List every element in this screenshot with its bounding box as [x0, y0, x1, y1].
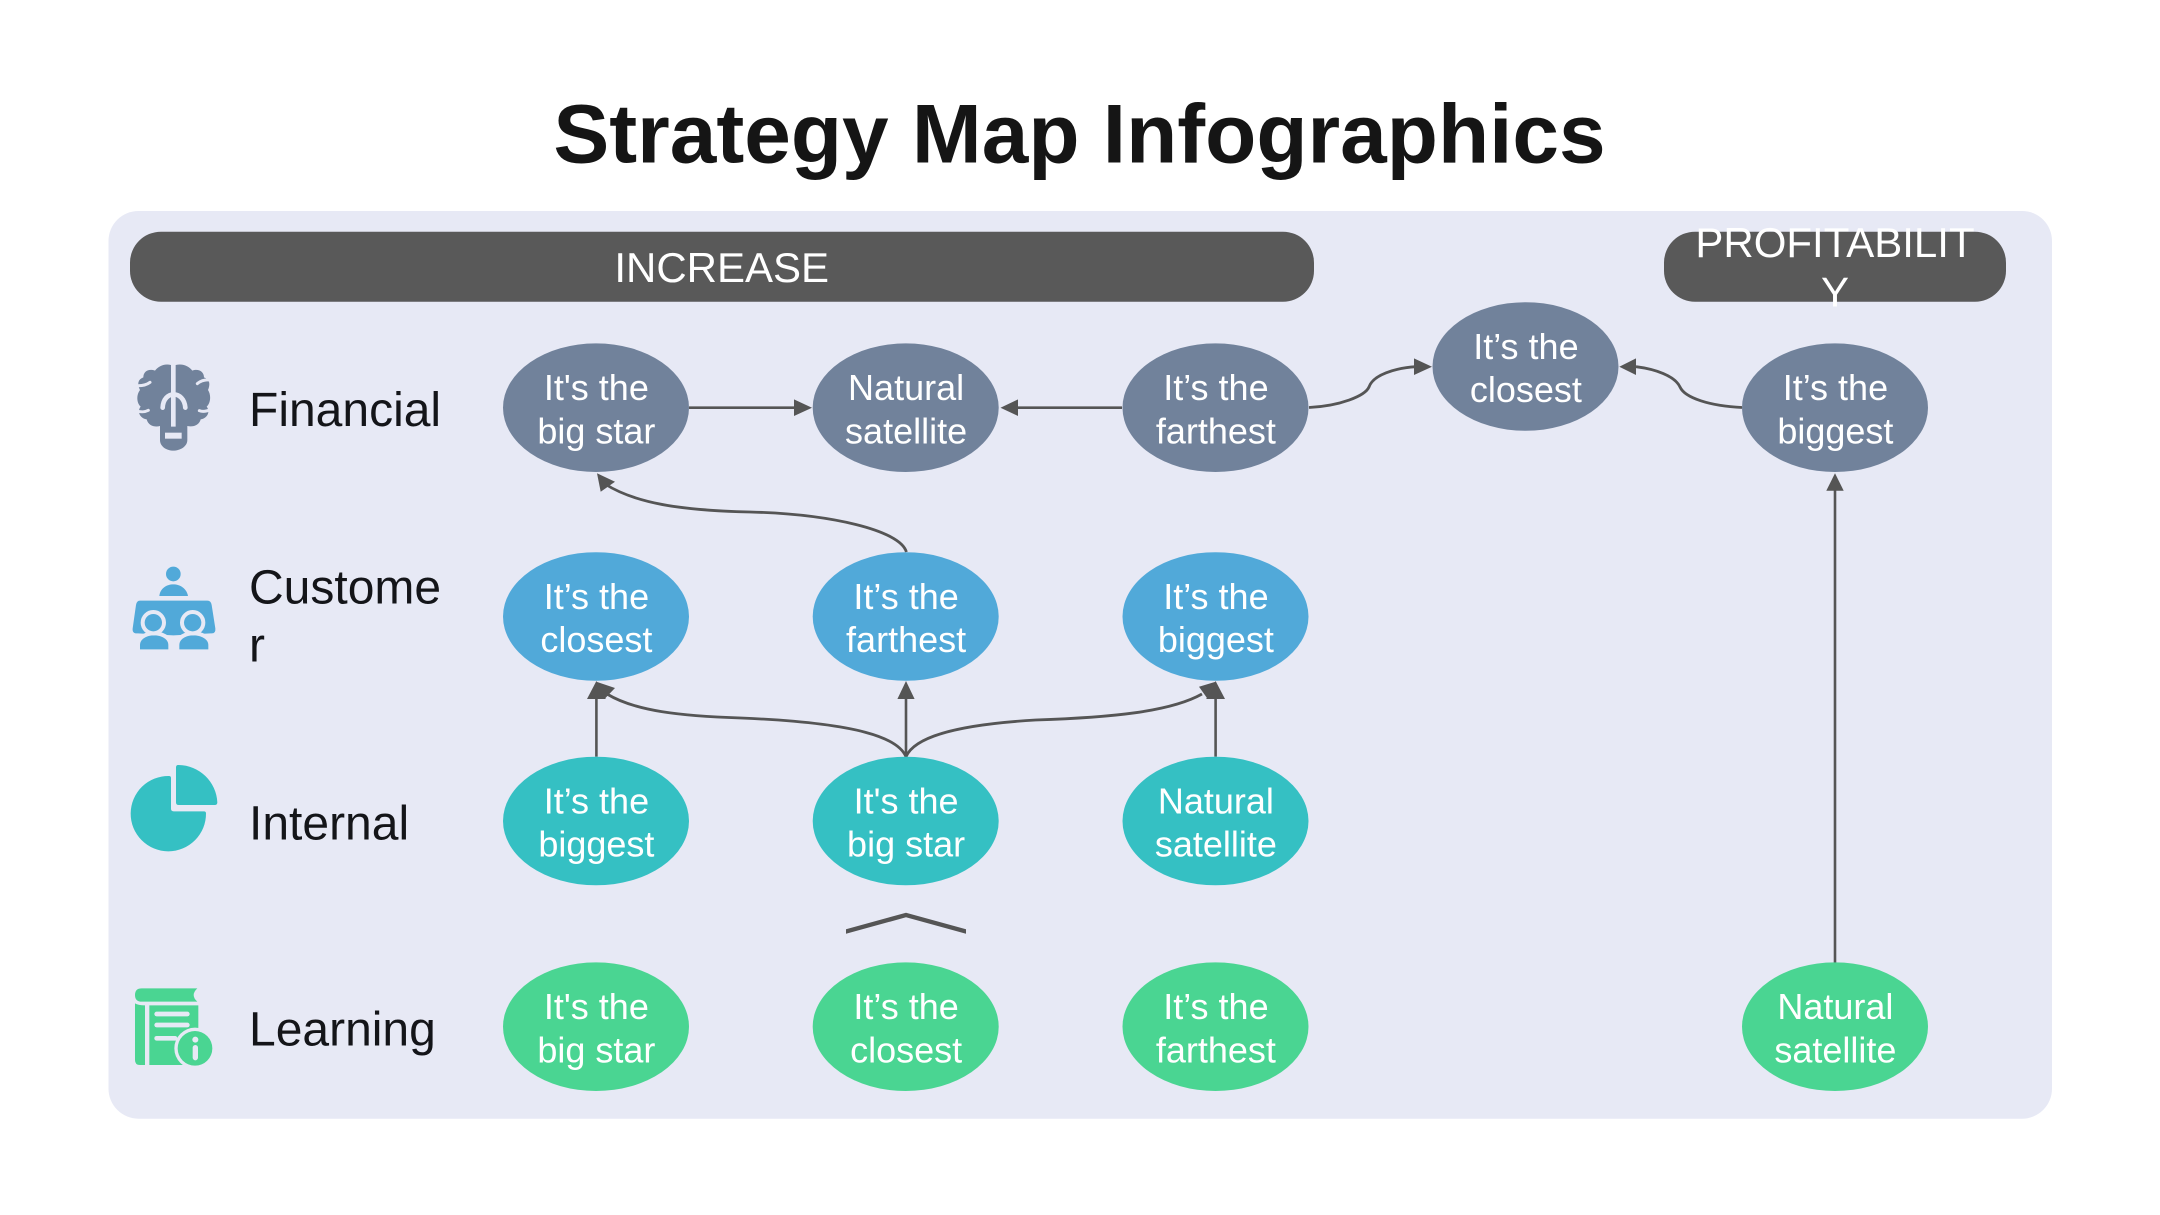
header pill: profitability: PROFITABILIT — [1695, 219, 1975, 266]
financial node: It's the big star: big star — [537, 410, 655, 451]
icon: book with info badge — [135, 988, 216, 1069]
internal node: Natural satellite: Natural — [1158, 780, 1274, 821]
row label: Customer: r — [249, 619, 265, 672]
row label: Learning: Learning — [249, 1004, 436, 1057]
learning node: It's the closest: It’s the — [853, 986, 959, 1027]
financial node: It's the biggest — [1742, 343, 1928, 472]
icon: brain with arrow — [136, 363, 211, 451]
financial node: Natural satellite: satellite — [845, 410, 967, 451]
financial node: It's the closest — [1432, 302, 1618, 431]
financial node: It's the biggest: It’s the — [1783, 367, 1888, 408]
icon: pie chart — [131, 765, 217, 851]
customer node: It's the closest — [503, 552, 689, 681]
chevron marker — [846, 913, 966, 934]
customer node: It's the farthest: It’s the — [853, 576, 959, 617]
financial node: It's the farthest — [1122, 343, 1308, 472]
panel: map background — [108, 211, 2052, 1119]
financial node: It's the farthest: farthest — [1156, 410, 1276, 451]
customer node: It's the farthest — [813, 552, 999, 681]
arrow: big star curve to biggest — [906, 682, 1216, 757]
arrow: farthest to closest — [1309, 358, 1432, 408]
financial node: It's the big star — [503, 343, 689, 472]
header pill: profitability — [1664, 219, 2006, 316]
internal node: It's the biggest: It’s the — [544, 780, 649, 821]
internal node: It's the big star — [813, 757, 999, 885]
learning node: Natural satellite — [1742, 962, 1928, 1091]
customer node: It's the biggest: biggest — [1158, 619, 1274, 660]
learning node: It's the farthest: It’s the — [1163, 986, 1269, 1027]
internal node: Natural satellite — [1122, 757, 1308, 885]
row label: Internal: Internal — [249, 797, 409, 850]
learning node: Natural satellite: Natural — [1777, 986, 1893, 1027]
internal node: It's the big star: big star — [847, 824, 965, 865]
internal node: It's the big star: It's the — [854, 780, 959, 821]
arrow: natural satellite to biggest long vertical — [1826, 473, 1844, 963]
header pill: increase — [130, 232, 1314, 302]
arrow: biggest to closest — [1619, 358, 1742, 408]
learning node: It's the big star: big star — [537, 1029, 655, 1070]
customer node: It's the closest: It’s the — [544, 576, 649, 617]
learning node: It's the closest — [813, 962, 999, 1091]
arrow: biggest to closest (vertical) — [587, 681, 606, 757]
header pill: profitability: Y — [1821, 268, 1849, 316]
arrow: farthest to natural satellite — [1000, 399, 1122, 416]
customer node: It's the biggest: It’s the — [1163, 576, 1269, 617]
learning node: It's the farthest — [1122, 962, 1308, 1091]
financial node: It's the farthest: It’s the — [1163, 367, 1269, 408]
customer node: It's the closest: closest — [540, 619, 652, 660]
internal node: It's the biggest — [503, 757, 689, 885]
arrow: natural satellite to biggest (vertical) — [1206, 681, 1225, 757]
internal node: It's the biggest: biggest — [538, 824, 654, 865]
row label: Customer: Custome — [249, 562, 441, 615]
arrow: big star to farthest (vertical) — [897, 681, 915, 757]
icon: meeting table with people — [133, 567, 215, 649]
customer node: It's the biggest — [1122, 552, 1308, 681]
learning node: It's the big star — [503, 962, 689, 1091]
title: Strategy Map Infographics — [553, 87, 1606, 181]
internal node: Natural satellite: satellite — [1155, 824, 1277, 865]
row label: Financial: Financial — [249, 384, 441, 437]
learning node: It's the big star: It's the — [544, 986, 649, 1027]
learning node: It's the closest: closest — [850, 1029, 962, 1070]
financial node: It's the big star: It's the — [544, 367, 649, 408]
learning node: Natural satellite: satellite — [1774, 1029, 1896, 1070]
financial node: It's the biggest: biggest — [1777, 410, 1893, 451]
customer node: It's the farthest: farthest — [846, 619, 966, 660]
financial node: Natural satellite: Natural — [848, 367, 964, 408]
arrow: big star curve to closest — [596, 682, 906, 757]
arrow: big star to natural satellite — [689, 399, 812, 416]
learning node: It's the farthest: farthest — [1156, 1029, 1276, 1070]
header pill: increase: INCREASE — [614, 244, 829, 291]
financial node: It's the closest: closest — [1470, 369, 1582, 410]
financial node: Natural satellite — [813, 343, 999, 472]
arrow: farthest up to big star — [597, 473, 906, 552]
financial node: It's the closest: It’s the — [1473, 326, 1579, 367]
